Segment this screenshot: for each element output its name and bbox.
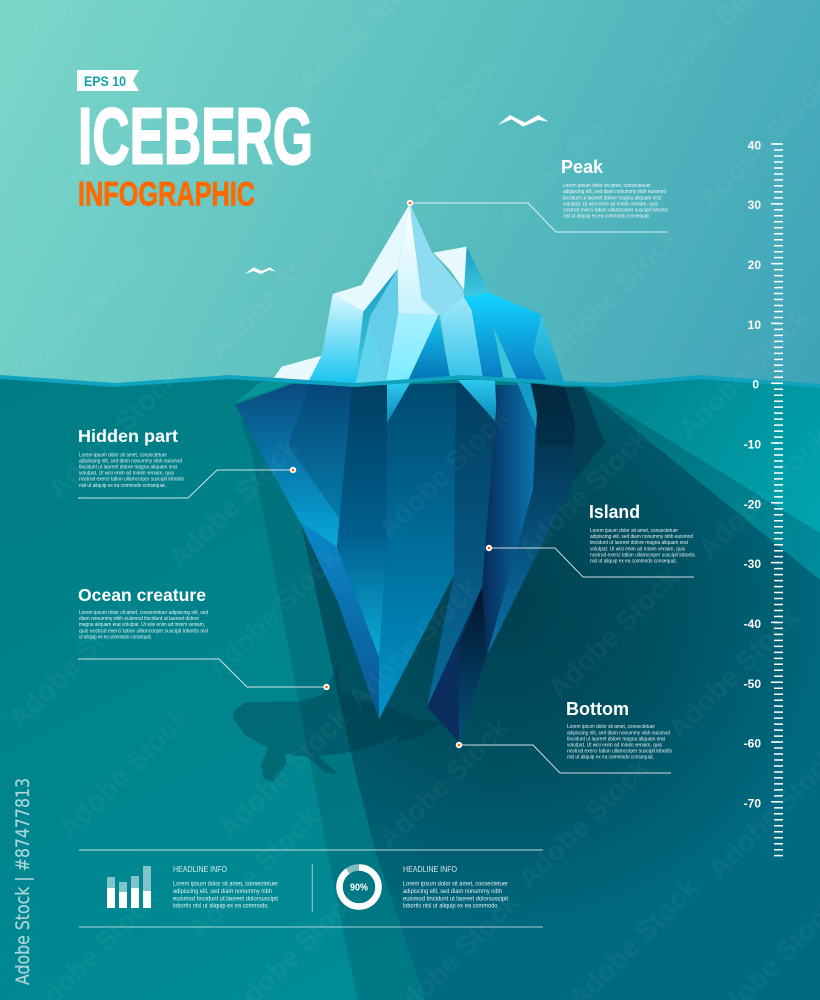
callout: Bottom: adipiscing elit, sed diam nonummy nibh euismod (567, 730, 670, 736)
vertical side label: Adobe Stock | #87477813 (12, 778, 34, 985)
text block: headline info right: HEADLINE INFO (403, 865, 457, 874)
callout: Ocean creature (78, 585, 330, 690)
watermarks: Adobe Stock (2, 592, 145, 735)
right center face (440, 297, 483, 377)
waterline (0, 375, 820, 388)
callout: Hidden part: nostrud exerci tation ullamcorper suscipit lobortis (79, 477, 184, 483)
cyan sliver (517, 382, 537, 430)
low left white ledge (274, 356, 322, 381)
iceberg: hidden underwater part (235, 380, 605, 742)
left face (309, 294, 363, 383)
callout: Island: Lorem ipsum dolor sit amet, consectetuer (590, 528, 678, 534)
underwater lower blue facet (300, 522, 379, 719)
text block: headline info left: Lorem ipsum dolor sit amet, consectetuer (173, 880, 279, 888)
callout: Bottom: Bottom (566, 699, 629, 719)
back teal facet (464, 247, 489, 297)
text block: headline info left: HEADLINE INFO (173, 865, 227, 874)
callout: Hidden part: Lorem ipsum dolor sit amet, consectetuer (79, 452, 167, 458)
ruler numbers: -10 (744, 438, 761, 452)
text block: headline info left: euismod tincidunt ut laoreet dolorsuscipit (173, 895, 278, 902)
back white facet (433, 247, 467, 290)
light shadow beam under the iceberg (240, 420, 440, 1000)
callout: Ocean creature: Ocean creature (78, 585, 206, 605)
deep shadow cast by the iceberg (300, 387, 820, 1000)
callout: Island: nostrud exerci tation ullamcorper suscipit lobortis (590, 552, 695, 558)
ruler numbers: -20 (744, 498, 761, 512)
callout: Bottom: tincidunt ut laoreet dolore magna aliquam erat (567, 736, 665, 742)
callout: Island: tincidunt ut laoreet dolore magna aliquam erat (590, 540, 688, 546)
watermarks: Adobe Stock (512, 752, 655, 895)
ruler numbers: 30 (748, 198, 761, 212)
callout: Peak (407, 157, 668, 232)
watermarks: Adobe Stock (542, 562, 685, 705)
callout: Peak: adipiscing elit, sed diam nonummy nibh euismod (563, 189, 666, 195)
watermarks: Adobe Stock (182, 802, 325, 945)
watermarks: Adobe Stock (212, 702, 355, 845)
text block: headline info right: lobortis nisl ut aliquip ex ea commodo. (403, 903, 499, 910)
callout: Hidden part: Hidden part (78, 426, 178, 446)
watermarks: Adobe Stock (512, 422, 655, 565)
callout: Island: Island (589, 502, 640, 522)
donut chart 90% (340, 868, 378, 906)
watermarks: Adobe Stock (42, 72, 185, 215)
callout: Bottom (456, 699, 672, 773)
callout: Peak: nostrud exerci tation ullamcorper suscipit lobortis (563, 208, 668, 214)
top white facet (333, 203, 410, 312)
watermarks: Adobe Stock (542, 222, 685, 365)
watermarks: Adobe Stock (42, 362, 185, 505)
small triangle (356, 318, 386, 383)
ruler numbers: -50 (744, 677, 761, 691)
watermarks: Adobe Stock (162, 432, 305, 575)
sky background (0, 0, 820, 392)
text block: headline info left: lobortis nisl ut aliquip ex ea commodo. (173, 903, 269, 910)
small inner facet (493, 327, 517, 379)
ruler numbers: 0 (752, 378, 759, 392)
ruler numbers: 10 (748, 318, 761, 332)
center peak facet (398, 203, 438, 315)
right edge facet (533, 315, 564, 382)
underwater left teal facet (235, 381, 292, 403)
text block: headline info right (403, 865, 509, 910)
watermarks: Adobe Stock (362, 52, 505, 195)
cyan wedge right (458, 380, 497, 423)
underwater central column (379, 383, 456, 719)
ruler numbers: 20 (748, 258, 761, 272)
black facet (531, 383, 575, 445)
callout: Peak: volutpat. Ut wisi enim ad minim veniam, quis (563, 201, 658, 207)
ruler numbers: -40 (744, 617, 761, 631)
underwater left facet (235, 384, 352, 547)
callout: Peak: tincidunt ut laoreet dolore magna aliquam erat (563, 195, 661, 201)
underwater right central column (427, 383, 498, 707)
ruler numbers: 40 (748, 138, 761, 152)
watermarks: Adobe Stock (492, 92, 635, 235)
ruler numbers: -70 (744, 796, 761, 810)
text block: headline info left: adipiscing elit, sed diam nonummy nibh (173, 888, 272, 895)
watermarks: Adobe Stock (662, 602, 805, 745)
callout: Island: volutpat. Ut wisi enim ad minim veniam, quis (590, 546, 685, 552)
blue facet (408, 316, 450, 380)
icon: seagull large (498, 115, 548, 127)
dark slot (355, 269, 398, 383)
callout: Ocean creature: diam nonummy nibh euismod tincidunt ut laoreet dolore (79, 616, 199, 622)
deepest facet (459, 587, 487, 742)
lower center facet (386, 313, 438, 381)
callout: Peak: Peak (561, 157, 604, 177)
callout: Peak: nisl ut aliquip ex ea commodo consequat. (563, 214, 650, 220)
watermarks: Adobe Stock (372, 712, 515, 855)
watermarks: Adobe Stock (202, 542, 345, 685)
callout: Peak: Lorem ipsum dolor sit amet, consectetuer (563, 183, 651, 189)
ruler numbers: -60 (744, 736, 761, 750)
icon: seagull small (245, 267, 276, 274)
title: ICEBERG (78, 92, 313, 180)
callout: Bottom: nisl ut aliquip ex ea commodo consequat. (567, 755, 654, 761)
mid facet (370, 269, 398, 381)
watermarks: Adobe Stock (372, 402, 515, 545)
callout: Hidden part: tincidunt ut laoreet dolore magna aliquam erat (79, 464, 177, 470)
callout: Island: nisl ut aliquip ex ea commodo consequat. (590, 558, 677, 564)
callout: Island (486, 502, 695, 577)
iceberg: visible part above water (274, 203, 564, 383)
bright blue right face (464, 293, 547, 381)
outer dark facet (565, 387, 605, 482)
watermarks: Adobe Stock (202, 222, 345, 365)
ruler ticks (771, 143, 779, 857)
callout: Hidden part: volutpat. Ut wisi enim ad minim veniam, quis (79, 471, 174, 477)
underwater column with cyan tip (337, 385, 387, 657)
callout: Island: adipiscing elit, sed diam nonummy nibh euismod (590, 534, 693, 540)
navy facet (427, 587, 482, 742)
callout: Hidden part (78, 426, 296, 498)
callout: Bottom: nostrud exerci tation ullamcorper suscipit lobortis (567, 749, 672, 755)
depth ruler (744, 138, 779, 857)
badge: EPS 10 (77, 70, 139, 91)
icon: whale silhouette (233, 663, 445, 782)
callout: Bottom: volutpat. Ut wisi enim ad minim veniam, quis (567, 742, 662, 748)
callout: Hidden part: adipiscing elit, sed diam nonummy nibh euismod (79, 458, 182, 464)
bottom info panel (79, 850, 543, 927)
watermarks: Adobe Stock (12, 242, 155, 385)
watermarks: Adobe Stock (342, 572, 485, 715)
callout: Ocean creature: ut aliquip ex ea commodo consequat. (79, 634, 152, 640)
bar chart (107, 866, 151, 908)
subtitle: INFOGRAPHIC (78, 176, 255, 214)
text block: headline info right: euismod tincidunt ut laoreet dolorsuscipit (403, 895, 508, 902)
right ridge facet (410, 203, 464, 315)
callout: Ocean creature: Lorem ipsum dolor sit amet, consectetuer adipiscing elit, sed (79, 610, 208, 616)
cyan wedge left (387, 383, 410, 423)
underwater left shaded facet (288, 384, 352, 520)
ocean background (0, 377, 820, 1000)
text block: headline info left (173, 865, 279, 910)
callout: Hidden part: nisl ut aliquip ex ea commodo consequat. (79, 483, 166, 489)
text block: headline info right: Lorem ipsum dolor sit amet, consectetuer (403, 880, 509, 888)
badge: EPS 10: EPS 10 (84, 73, 126, 89)
callout: Ocean creature: magna aliquam erat volutpat. Ut wisi enim ad minim veniam, (79, 622, 205, 628)
underwater right blue facet (482, 385, 537, 655)
ruler numbers: -30 (744, 557, 761, 571)
callout: Bottom: Lorem ipsum dolor sit amet, consectetuer (567, 724, 655, 730)
callout: Ocean creature: quis nostrud exerci tation ullamcorper suscipit lobortis nisl (79, 628, 208, 634)
underwater far right facet (487, 413, 575, 655)
ruler numbers (744, 138, 761, 810)
watermarks: Adobe Stock (672, 302, 815, 445)
donut chart 90%: 90% (350, 882, 368, 894)
watermarks: Adobe Stock (52, 702, 195, 845)
text block: headline info right: adipiscing elit, sed diam nonummy nibh (403, 888, 502, 895)
